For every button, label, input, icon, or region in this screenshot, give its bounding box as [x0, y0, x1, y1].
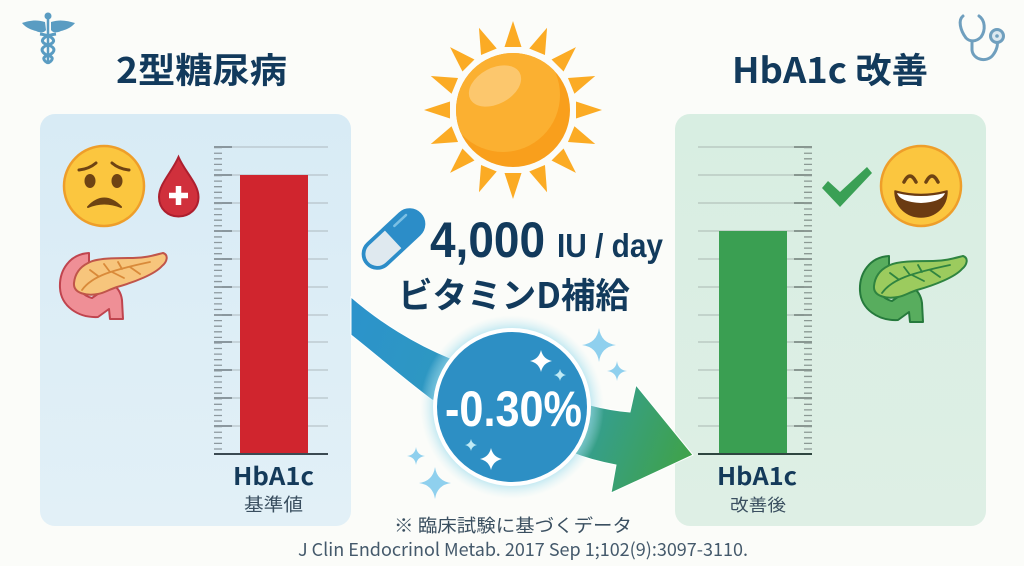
- right chart label: HbA1c: [717, 457, 797, 492]
- icon: sun: [424, 21, 602, 199]
- left chart label: HbA1c: [233, 457, 314, 492]
- callout: minus 0.30 percent: -0.30%: [445, 381, 582, 437]
- sparkles inside circle: [465, 350, 566, 470]
- title: type 2 diabetes: 2型糖尿病: [116, 43, 287, 94]
- arrow: baseline to improvement: [351, 297, 693, 493]
- panel: type 2 diabetes: [40, 114, 351, 526]
- right chart: [698, 147, 812, 454]
- dose text: 4,000: [430, 212, 545, 268]
- icon: check mark: [822, 167, 872, 207]
- citation: J Clin Endocrinol Metab. 2017 Sep 1;102(9):3097-3110.: [298, 536, 748, 562]
- vitamin D heading: ビタミンD補給: [398, 268, 630, 319]
- callout: minus 0.30 percent: [420, 315, 604, 499]
- sparkles outside circle: [407, 328, 627, 499]
- icon: inflamed pancreas: [60, 253, 167, 319]
- icon: happy face: [881, 146, 961, 226]
- dose text: [430, 212, 664, 268]
- icon: stethoscope: [960, 16, 1004, 60]
- dose text: IU / day: [557, 227, 664, 264]
- right chart label: [717, 457, 797, 516]
- left chart label: 基準値: [244, 491, 303, 517]
- footnote: ※ 臨床試験に基づくデータ: [394, 512, 632, 538]
- title: HbA1c improvement: HbA1c 改善: [732, 43, 928, 94]
- right chart label: 改善後: [730, 491, 786, 516]
- left chart: [214, 147, 328, 454]
- left chart label: [233, 457, 314, 517]
- icon: healthy pancreas: [860, 256, 967, 322]
- panel: HbA1c improvement: [675, 114, 986, 526]
- icon: caduceus: [22, 12, 75, 64]
- icon: blood drop: [159, 157, 198, 216]
- icon: worried face: [64, 146, 144, 226]
- icon: capsule: [356, 203, 431, 275]
